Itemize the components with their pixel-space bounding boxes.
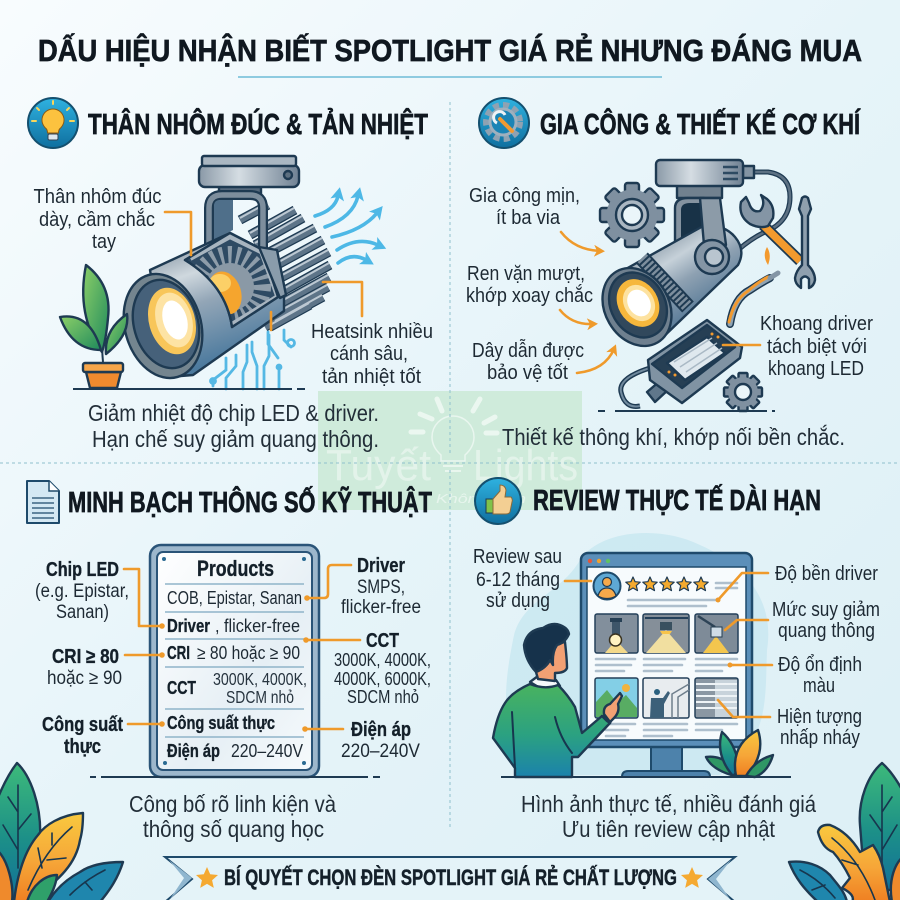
callout: khoang driver: tách biệt với [767, 336, 867, 358]
icon: large gear [600, 183, 664, 247]
icon: star right [681, 867, 703, 888]
caption [88, 400, 379, 452]
callout: dây dẫn [472, 339, 614, 384]
callout: độ ổn định màu [728, 654, 862, 697]
callout: ren vặn mượt [466, 263, 593, 324]
caption [129, 791, 337, 842]
callout: mức suy giảm quang thông [725, 599, 880, 642]
spec board: Products [197, 556, 274, 581]
callout: hiện tượng nhấp nháy: nhấp nháy [780, 727, 860, 749]
spec board: , flicker-free [215, 616, 300, 636]
callout: heatsink [271, 282, 433, 388]
spec board: 3000K, 4000K, [213, 669, 307, 689]
heading: THÂN NHÔM ĐÚC & TẢN NHIỆT [88, 107, 428, 141]
five-star rating [626, 577, 708, 591]
watermark [318, 391, 582, 510]
monitor [581, 553, 752, 777]
callout: driver: flicker-free [341, 597, 421, 618]
caption: Hình ảnh thực tế, nhiều đánh giá [521, 791, 817, 817]
photo: spotlight [595, 614, 638, 653]
spec board: CRI [167, 643, 190, 663]
callout: driver: Driver [357, 555, 405, 577]
icon: small gear [724, 373, 762, 411]
spec board: ≥ 80 hoặc ≥ 90 [197, 643, 300, 663]
callout: gia công mịn [469, 185, 600, 251]
callout: heatsink: cánh sâu, [330, 343, 408, 365]
banner text: BÍ QUYẾT CHỌN ĐÈN SPOTLIGHT GIÁ RẺ CHẤT LƯỢNG [224, 865, 677, 890]
callout: khoang driver: Khoang driver [760, 313, 873, 335]
icon: gear and wrench [479, 98, 529, 148]
corner foliage: bottom right [789, 763, 900, 900]
panel: gia công & thiết kế cơ khí [466, 98, 873, 450]
photo: installer [643, 678, 689, 718]
wires [729, 273, 778, 324]
callout: công suất thực [42, 714, 165, 758]
icon: wrench and screwdriver tools [740, 195, 815, 288]
photo: landscape [595, 678, 638, 718]
callout: dây dẫn: Dây dẫn được [472, 339, 584, 362]
callout: điện áp: 220–240V [341, 741, 420, 762]
caption: Thiết kế thông khí, khớp nối bền chắc. [502, 424, 845, 450]
plant by monitor [706, 730, 773, 777]
person pointing at screen [493, 624, 622, 777]
panel: review thực tế dài hạn [473, 478, 880, 842]
panel: minh bạch thông số kỹ thuật [27, 481, 432, 842]
callout: heatsink: tản nhiệt tốt [322, 366, 421, 388]
callout: review sau 6-12 tháng: Review sau [473, 546, 562, 568]
callout: thân nhôm đúc: Thân nhôm đúc [34, 186, 162, 208]
callout: điện áp: Điện áp [351, 719, 411, 741]
corner foliage: bottom left [0, 763, 123, 900]
callout: CRI: hoặc ≥ 90 [47, 668, 122, 689]
spec board: Điện áp [167, 741, 220, 761]
callout: driver [304, 555, 421, 618]
callout: mức suy giảm quang thông: quang thông [778, 620, 875, 642]
callout: CCT: 3000K, 4000K, [334, 650, 431, 670]
callout: mức suy giảm quang thông: Mức suy giảm [772, 599, 880, 621]
callout: review sau 6-12 tháng [473, 546, 591, 612]
callout: CCT [303, 630, 431, 707]
callout: thân nhôm đúc [34, 186, 191, 255]
caption: thông số quang học [143, 816, 324, 842]
icon: airflow arrows [315, 196, 378, 263]
callout: độ ổn định màu: màu [803, 675, 835, 697]
photo: ceiling light [643, 614, 689, 653]
callout: chip LED [35, 559, 165, 629]
callout: gia công mịn: Gia công mịn, [469, 185, 580, 207]
icon: driver box [621, 320, 742, 406]
callout: CCT: 4000K, 6000K, [334, 669, 431, 689]
callout: độ bền driver: Độ bền driver [775, 563, 878, 585]
callout: công suất thực: Công suất [42, 714, 123, 736]
icon: document [27, 481, 59, 523]
avatar [594, 572, 620, 600]
illustration: spotlight with heatsink [112, 156, 330, 387]
callout: chip LED: Sanan) [56, 602, 109, 623]
illustration: spotlight with track mount [589, 160, 790, 359]
callout: độ ổn định màu: Độ ổn định [778, 654, 862, 676]
callout: CRI: CRI ≥ 80 [52, 646, 119, 668]
callout: độ bền driver [716, 563, 878, 602]
callout: chip LED: Chip LED [46, 559, 119, 581]
callout: CCT: CCT [366, 630, 399, 652]
spec board: CCT [167, 678, 196, 698]
callout: hiện tượng nhấp nháy [718, 700, 862, 749]
watermark: Tuyết [326, 441, 431, 490]
callout: review sau 6-12 tháng: sử dụng [486, 590, 550, 612]
photo: flicker lines [695, 678, 738, 718]
spec board: COB, Epistar, Sanan [167, 588, 302, 608]
spec board [150, 545, 319, 777]
spec board: Công suất thực [167, 713, 275, 733]
callout: gia công mịn: ít ba via [496, 207, 561, 229]
caption: Hạn chế suy giảm quang thông. [92, 426, 379, 452]
caption: Công bố rõ linh kiện và [129, 791, 337, 817]
callout: driver: SMPS, [357, 577, 405, 598]
panel: thân nhôm đúc & tản nhiệt [28, 98, 433, 452]
callout: công suất thực: thực [64, 736, 101, 758]
caption: Ưu tiên review cập nhật [562, 816, 775, 842]
circuit traces [210, 330, 294, 389]
callout: điện áp [302, 719, 420, 762]
heading: MINH BẠCH THÔNG SỐ KỸ THUẬT [68, 485, 432, 519]
callout: ren vặn mượt: khớp xoay chắc [466, 284, 593, 307]
callout: thân nhôm đúc: dày, cầm chắc [39, 208, 155, 231]
caption [521, 791, 817, 842]
callout: review sau 6-12 tháng: 6-12 tháng [476, 569, 560, 591]
icon: potted plant [60, 265, 127, 388]
icon: light bulb [28, 98, 78, 148]
watermark: Không gian [436, 491, 526, 506]
icon: thumbs up [475, 478, 521, 524]
background blob [506, 533, 768, 775]
photo: wall light [695, 614, 738, 653]
callout: CCT: SDCM nhỏ [347, 687, 419, 707]
callout: ren vặn mượt: Ren vặn mượt, [467, 263, 585, 285]
spec board: Driver [167, 616, 210, 636]
callout: hiện tượng nhấp nháy: Hiện tượng [777, 706, 862, 728]
callout: heatsink: Heatsink nhiều [311, 321, 433, 343]
callout: thân nhôm đúc: tay [92, 231, 116, 253]
spec board: SDCM nhỏ [226, 687, 294, 707]
icon: star left [196, 867, 218, 888]
callout: CRI [47, 646, 165, 689]
callout: khoang driver: khoang LED [768, 358, 864, 380]
callout: dây dẫn: bảo vệ tốt [487, 362, 568, 384]
callout: khoang driver [723, 313, 873, 380]
bottom banner [165, 857, 735, 900]
watermark: Lights [473, 441, 578, 490]
spec board: 220–240V [231, 741, 303, 761]
callout: chip LED: (e.g. Epistar, [35, 581, 129, 602]
caption: Giảm nhiệt độ chip LED & driver. [88, 400, 379, 426]
